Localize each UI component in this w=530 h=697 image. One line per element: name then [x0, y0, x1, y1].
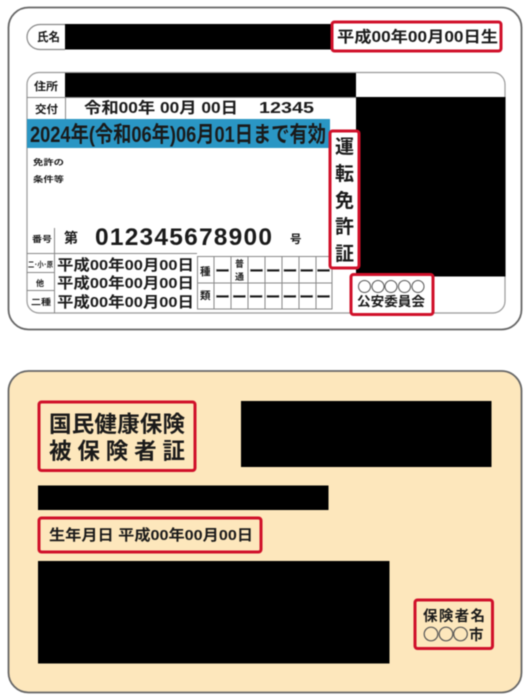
license title callout: 証: [335, 243, 354, 265]
license type grid: [198, 256, 332, 309]
insurer callout: [415, 600, 492, 648]
address row: 住所: [34, 79, 58, 93]
birth date callout: [39, 518, 261, 552]
insurer callout: 保険者名: [423, 607, 485, 625]
insurer callout: 市: [469, 626, 484, 644]
redaction: name bar: [38, 486, 328, 510]
panel: health insurance card: [8, 371, 522, 692]
conditions label: [33, 157, 64, 184]
license number: 番号: [32, 234, 53, 244]
license type grid: ーーーーー: [249, 263, 331, 280]
issue date row: 12345: [259, 100, 314, 117]
issuer callout: 公安委員会: [357, 294, 425, 309]
license type grid: ーーーーーーー: [215, 289, 331, 306]
license class dates: 二種: [31, 297, 52, 307]
license type grid: ー: [215, 263, 230, 280]
license class dates: 平成00年00月00日: [57, 293, 194, 311]
expiry band: 2024年(令和06年)06月01日まで有効: [30, 122, 326, 147]
panel: driver's license card: [8, 8, 522, 330]
address row: [27, 73, 356, 98]
issue date row: [35, 97, 314, 119]
issue date row: 令和00年 00月 00日: [84, 98, 238, 117]
license title callout: 転: [335, 163, 354, 185]
photo redaction: [356, 97, 506, 276]
insurance title callout: [39, 402, 195, 470]
license class dates: 他: [36, 278, 44, 288]
license number: 号: [290, 233, 302, 246]
insurance title callout: 被保険者証: [49, 439, 185, 464]
license title callout: 運: [335, 136, 354, 158]
license type grid: 種: [200, 265, 211, 278]
redaction: top right: [241, 401, 492, 467]
license class dates: 平成00年00月00日: [57, 274, 194, 292]
name row: [27, 24, 332, 50]
license type grid: 類: [200, 289, 211, 302]
birth date callout: 平成00年00月00日生: [337, 27, 498, 46]
name row: 氏名: [37, 29, 60, 44]
main data panel: [27, 72, 506, 313]
license class dates: [27, 254, 197, 311]
birth date callout: 生年月日 平成00年00月00日: [49, 526, 253, 544]
license type grid: 普: [235, 258, 244, 269]
birth date callout: [332, 22, 501, 51]
conditions label: 条件等: [33, 174, 64, 184]
issuer callout: [351, 274, 433, 314]
insurance title callout: 国民健康保険: [49, 412, 185, 437]
license number: 第: [64, 230, 78, 246]
license title callout: [330, 131, 359, 268]
license type grid: 通: [235, 272, 244, 282]
license title callout: 許: [335, 215, 354, 238]
license class dates: 平成00年00月00日: [57, 256, 194, 274]
license title callout: 免: [335, 189, 354, 212]
conditions label: 免許の: [33, 157, 64, 167]
redaction: lower block: [38, 561, 390, 664]
license number: [32, 224, 302, 313]
license number: 012345678900: [95, 224, 272, 251]
license class dates: 二･小･原: [28, 259, 53, 269]
issue date row: 交付: [35, 102, 58, 116]
